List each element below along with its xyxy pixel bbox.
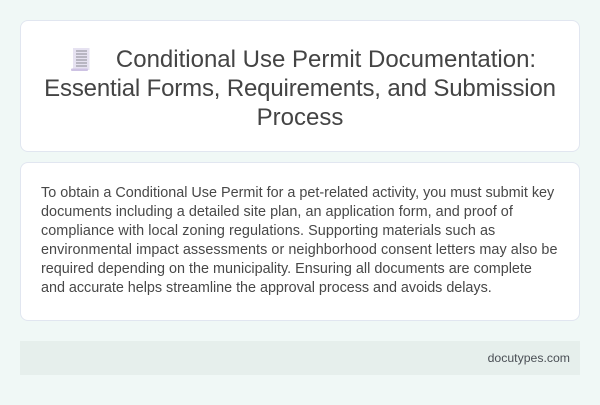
description text: required depending on the municipality. Ensuring all documents are complete (41, 261, 532, 277)
footer bar (20, 341, 580, 375)
icon: document (71, 48, 90, 71)
description text: To obtain a Conditional Use Permit for a pet-related activity, you must submit key (41, 185, 554, 201)
description text: documents including a detailed site plan, an application form, and proof of (41, 204, 513, 220)
description text: compliance with local zoning regulations. Supporting materials such as (41, 223, 495, 239)
title line 2: Essential Forms, Requirements, and Submission (44, 75, 556, 102)
title line 1: Conditional Use Permit Documentation: (116, 46, 536, 73)
footer source text: docutypes.com (488, 351, 570, 365)
title line 3: Process (257, 104, 343, 131)
description text: environmental impact assessments or neighborhood consent letters may also be (41, 242, 558, 258)
panel: title card (20, 20, 580, 152)
description text: and accurate helps streamline the approval process and avoids delays. (41, 280, 492, 296)
panel: description card (20, 162, 580, 321)
